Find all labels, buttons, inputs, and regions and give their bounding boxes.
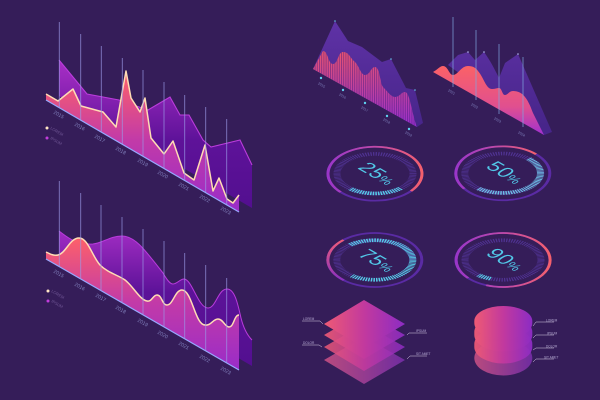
outer ring <box>328 147 422 201</box>
year labels <box>52 110 232 217</box>
chart: jagged isometric area chart <box>46 22 252 217</box>
peak markers <box>467 51 519 55</box>
year labels: 2015 <box>52 110 65 121</box>
year labels: 2018 <box>114 305 127 316</box>
stacked cylinder diagram <box>474 306 559 376</box>
year labels: 2021 <box>177 341 190 352</box>
front area <box>433 66 544 135</box>
legend <box>46 126 64 146</box>
chart: smooth area chart top right <box>433 17 552 138</box>
disc 1 <box>474 306 532 340</box>
year labels: 2015 <box>317 82 326 89</box>
outer ring <box>456 233 550 287</box>
baseline <box>46 100 239 212</box>
value: 50% <box>480 159 530 187</box>
year labels: 2017 <box>360 106 369 113</box>
layer 4 <box>324 337 405 384</box>
callouts: IPSUM <box>547 332 557 336</box>
gauge: 90 percent <box>456 233 550 287</box>
value: 90% <box>480 246 530 274</box>
year labels: 2022 <box>198 354 211 365</box>
year labels: 2016 <box>338 93 347 100</box>
front bars area <box>313 51 417 127</box>
callouts <box>302 317 431 359</box>
chart: bar area chart top <box>313 20 423 138</box>
vertical markers <box>453 17 523 127</box>
year labels: 2016 <box>73 282 86 293</box>
back area series <box>59 231 252 366</box>
callouts <box>533 318 559 362</box>
year labels: 2020 <box>156 330 169 341</box>
callouts: LOREM <box>546 318 558 322</box>
bar stripes <box>313 51 417 127</box>
callouts: SIT AMET <box>544 356 559 360</box>
gauge: 75 percent <box>328 233 422 287</box>
year labels: 2021 <box>447 89 456 96</box>
year labels: 2019 <box>136 318 149 329</box>
tick ring <box>465 154 541 193</box>
front area series <box>46 238 239 370</box>
back area <box>448 52 552 135</box>
year labels <box>52 269 232 377</box>
layer 1 <box>324 300 405 348</box>
value: 25% <box>352 160 402 188</box>
legend: IPSUM <box>50 136 63 146</box>
year labels <box>317 82 413 138</box>
tick ring <box>337 240 413 280</box>
layer 3 <box>324 324 405 371</box>
year labels: 2023 <box>219 206 232 217</box>
tick ring <box>337 154 413 193</box>
back area <box>313 21 423 127</box>
back series outline <box>59 231 252 340</box>
vertical year markers <box>59 22 227 204</box>
legend <box>46 289 65 309</box>
year labels: 2018 <box>114 146 127 157</box>
disc 2 <box>474 316 532 352</box>
back series outline <box>59 60 252 165</box>
callouts: SIT AMET <box>416 352 431 356</box>
disc 4 <box>474 341 532 376</box>
tick ring <box>465 240 541 280</box>
year labels: 2021 <box>177 182 190 193</box>
legend: IPSUM <box>50 299 64 309</box>
legend: LOREM <box>50 126 64 137</box>
year labels: 2023 <box>219 366 232 377</box>
peak markers <box>334 20 416 91</box>
value: 75% <box>352 247 402 275</box>
callouts: IPSUM <box>416 329 426 333</box>
baseline <box>46 259 239 370</box>
outer ring <box>456 146 550 200</box>
pins <box>320 77 410 130</box>
front series line <box>46 238 239 327</box>
stacked layers diagram <box>302 300 431 384</box>
year labels: 2017 <box>94 293 107 304</box>
year labels: 2015 <box>52 269 65 280</box>
year labels: 2022 <box>470 103 479 110</box>
callouts: LOREM <box>303 317 315 321</box>
outer ring <box>328 233 422 287</box>
year labels: 2023 <box>493 117 502 124</box>
year labels: 2019 <box>136 158 149 169</box>
year labels: 2022 <box>198 194 211 205</box>
year labels: 2019 <box>404 131 413 138</box>
disc 3 <box>474 328 532 364</box>
callouts: DOLOR <box>303 341 315 345</box>
front area series <box>46 71 239 212</box>
layer 2 <box>324 312 405 359</box>
back area series <box>59 60 252 208</box>
gauge: 25 percent <box>328 147 422 201</box>
gauge: 50 percent <box>456 146 550 200</box>
year labels: 2018 <box>382 118 391 125</box>
callouts: DOLOR <box>546 344 558 348</box>
front series line <box>46 71 239 203</box>
chart: smooth isometric area chart <box>46 181 252 377</box>
legend: LOREM <box>50 289 65 300</box>
year labels: 2024 <box>517 131 526 138</box>
vertical year markers <box>59 181 227 363</box>
year labels: 2016 <box>73 122 86 133</box>
year labels: 2020 <box>156 170 169 181</box>
year labels: 2017 <box>93 134 106 145</box>
year labels <box>447 89 526 138</box>
